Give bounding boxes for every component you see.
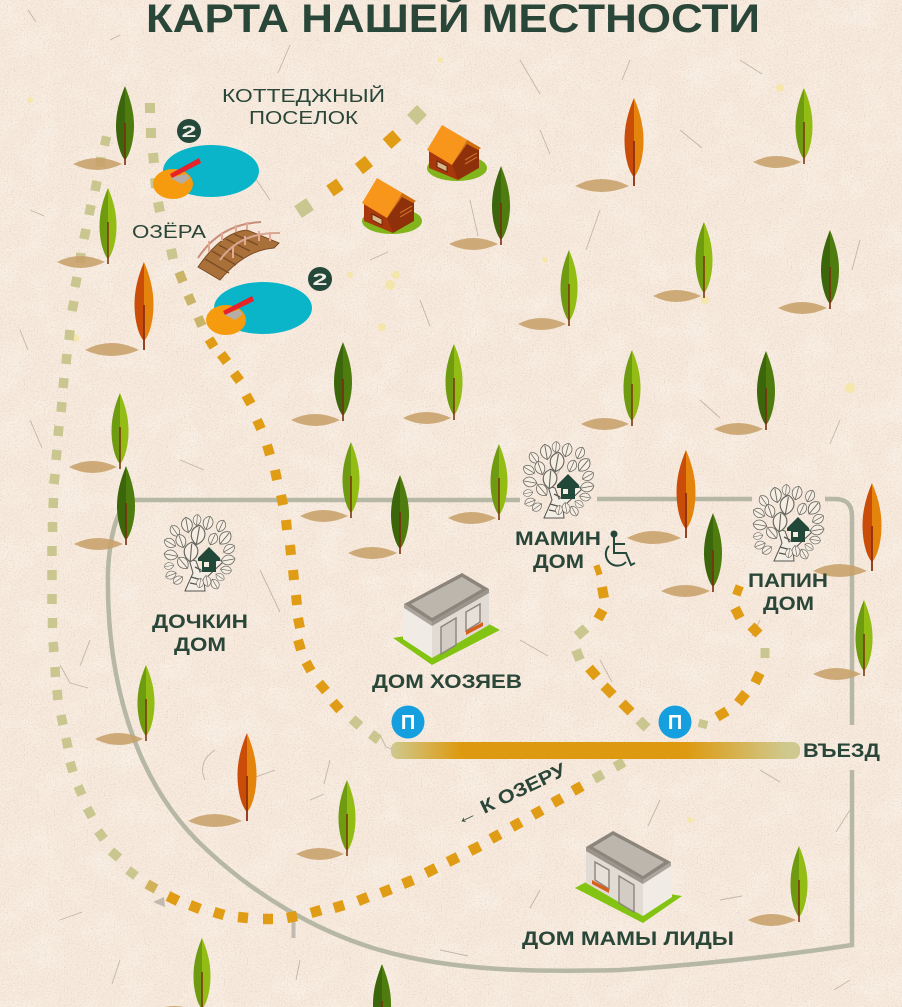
badge: 2 lower lake: 2 [312,270,328,289]
dashed trail: outer path gold part [168,786,582,919]
badge: parking left [392,706,424,738]
dashed trail: lake path gold part [209,339,340,710]
label: lakes: ОЗЁРА [132,221,207,242]
badge: parking right: П [668,712,682,734]
badge: 2 upper lake: 2 [182,122,196,141]
dashed trail: outer path pale part [52,140,136,876]
badge: parking left: П [401,712,415,734]
label: mother's house line 2: ДОМ [533,552,584,573]
label: entrance: ВЪЕЗД [803,741,881,762]
label: to the lake: ← К ОЗЕРУ [452,760,570,831]
house: owners [393,573,500,665]
dashed trail: mamin loop gold [589,569,631,712]
label: father's house line 2: ДОМ [763,594,814,615]
dashed trail: outer path transition [147,884,156,889]
bridge [198,222,280,280]
icon: tree house mother [521,441,596,518]
label: cottage settlement: КОТТЕДЖНЫЙ [222,85,385,106]
cottage lower [362,178,422,234]
dashed trail: cottage path [330,135,397,191]
dashed trail: outer path pale end [594,762,624,779]
label: owners' house: ДОМ ХОЗЯЕВ [372,672,522,693]
dashed trail: mamin loop pale [576,628,647,728]
icon: wheelchair [606,532,635,566]
badge: 2 upper lake [177,119,201,143]
label: father's house: ПАПИН [748,571,828,592]
dashed trail: lake path pale part [150,103,173,259]
dashed trail: lake path pale end [352,719,379,740]
badge: parking right [658,706,692,738]
cottage upper [427,125,487,181]
label: daughter's house line 2: ДОМ [174,635,226,656]
icon: tree house father [751,484,826,561]
label: mother's house: МАМИН [515,529,601,550]
dashed trail: lake path mid part [179,272,202,326]
label: mama Lida's house: ДОМ МАМЫ ЛИДЫ [522,929,734,950]
lake 2 [206,282,312,335]
dashed trail: papin loop gold [717,589,760,717]
dashed trail: papin loop pale [702,648,765,728]
label: daughter's house: ДОЧКИН [152,612,248,633]
label: cottage settlement line 2: ПОСЕЛОК [249,107,358,128]
badge: 2 lower lake [308,267,332,291]
lake 1 [153,145,259,199]
road to entrance [391,742,800,759]
icon: tree house daughter [162,514,237,591]
dashed trail: cottage path pale ends [298,110,422,212]
house: mama Lida [575,831,682,923]
boundary line [108,499,852,971]
